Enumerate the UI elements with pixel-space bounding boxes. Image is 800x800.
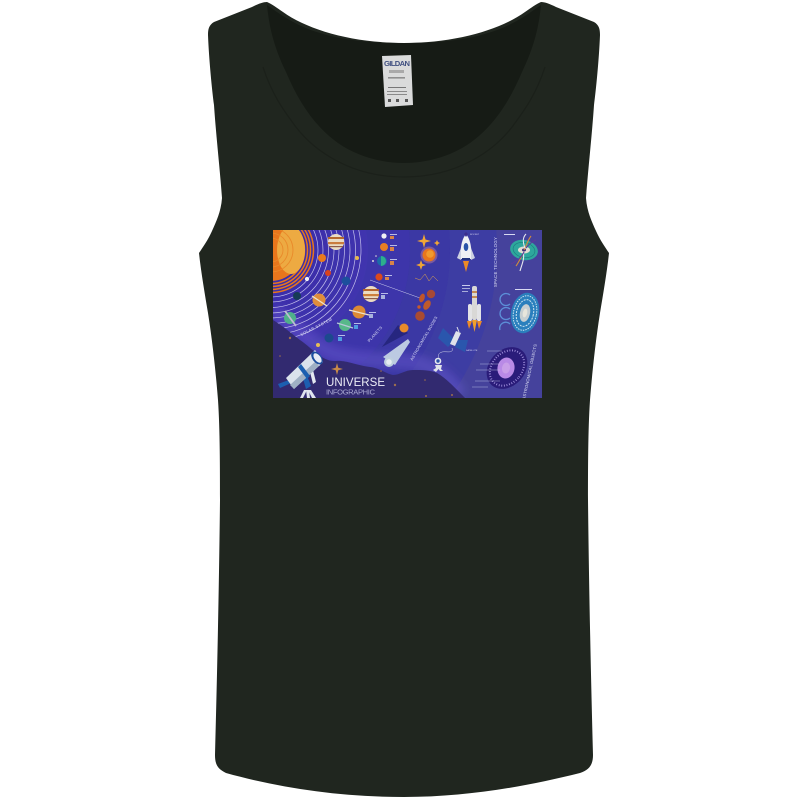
collar hem [263, 67, 545, 177]
icon: constellation [415, 274, 438, 281]
title [326, 378, 385, 394]
tank top garment [199, 2, 609, 797]
icon: ring gauges [500, 294, 510, 330]
icon: asteroids [415, 290, 435, 321]
astronomical objects [472, 234, 543, 397]
icon: rocket one [457, 232, 475, 272]
section labels: ASTRONOMICAL BODIES [409, 315, 439, 361]
icon: purple galaxy [486, 347, 528, 389]
icon: wormhole disk [508, 234, 540, 271]
section labels: SOLAR SYSTEM [300, 316, 333, 337]
tripod [300, 390, 316, 398]
icon: star globe [420, 246, 438, 264]
section labels [300, 237, 538, 400]
captions: SATELLITE [466, 349, 478, 352]
icon: satellite [438, 327, 468, 352]
subtitle: INFOGRAPHIC [326, 388, 376, 396]
icon: sun [273, 230, 314, 294]
neck label [382, 55, 413, 107]
icon: stars [416, 234, 440, 270]
planets column [316, 233, 388, 347]
icon: glowing star [331, 363, 343, 375]
striped giant [328, 234, 344, 250]
icon: comet [383, 339, 410, 367]
section labels: ASTRONOMICAL OBJECTS [521, 343, 538, 400]
planet captions [338, 234, 397, 341]
icon: meteor [382, 324, 408, 347]
section labels: SPACE TECHNOLOGY [493, 237, 498, 287]
section labels: PLANETS [366, 325, 383, 343]
captions [462, 234, 532, 352]
tube [286, 353, 320, 389]
main title: UNIVERSE [326, 377, 385, 389]
ringed planet green [284, 311, 296, 326]
icon: rocket two [467, 286, 482, 332]
printed universe infographic [273, 230, 542, 398]
pointer line [370, 280, 420, 298]
solar system planets [284, 234, 359, 326]
space technology [433, 232, 532, 372]
inside of neck [267, 5, 541, 163]
ringed planet orange [312, 294, 327, 306]
leader lines [472, 351, 502, 387]
brand name: GILDAN [384, 59, 410, 68]
icon: telescope [278, 349, 325, 398]
panel: solar system orbits [273, 230, 362, 337]
captions: ROCKET [470, 234, 480, 236]
icon: spiral galaxy [510, 292, 540, 334]
ground hill [273, 320, 465, 398]
hill glow [273, 312, 460, 395]
outer background band [456, 230, 542, 398]
astronomical bodies [382, 234, 440, 367]
icon: astronaut [433, 348, 452, 372]
